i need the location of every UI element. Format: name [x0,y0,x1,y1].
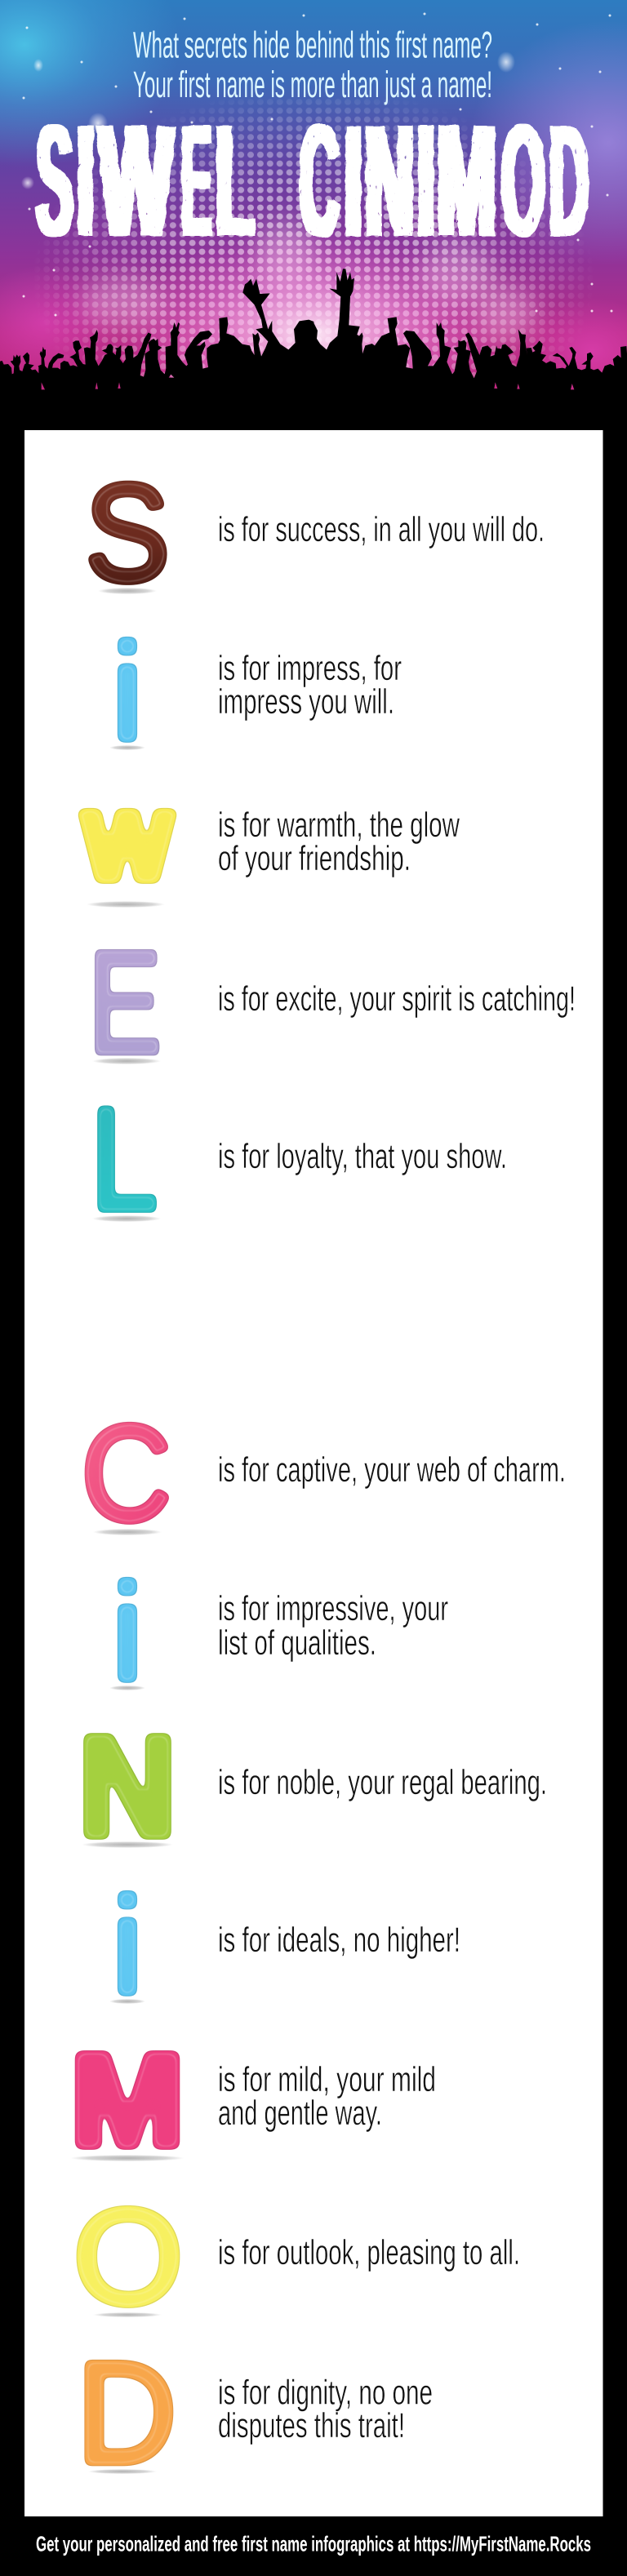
text: I lines: impress you will. [218,682,394,722]
text: D lines: is for dignity, no one [218,2374,433,2413]
row: third I [109,1871,460,2022]
header background [0,0,627,390]
title: O [501,91,545,270]
title: I [417,91,435,270]
black band below crowd [0,390,627,439]
icon: letter N: N [79,1707,176,1865]
icon: letter M: M [71,2027,184,2173]
panel: white letter list [24,430,603,2516]
row: C [82,1397,566,1548]
icon: letter E: E [88,922,162,1083]
text: D lines: disputes this trait! [218,2406,405,2445]
title: I [345,91,362,270]
subtitle [133,24,492,105]
row: first I [109,617,402,768]
icon: letter L: L [91,1079,158,1240]
title [34,91,589,270]
title: M [437,91,496,270]
crowd silhouette [0,269,627,400]
row: W [83,794,460,908]
text: I line: is for ideals, no higher! [218,1921,460,1960]
icon: letter D: D [77,2332,176,2494]
icon: letter C: C [82,1397,171,1548]
title: L [216,91,255,270]
text: M lines: and gentle way. [218,2094,382,2133]
icon: letter O: O [73,2181,183,2332]
text: W lines: is for warmth, the glow [218,806,460,845]
row: N [79,1707,547,1865]
icon: letter I: i [113,617,142,768]
title: D [549,91,589,270]
row: O [73,2181,520,2332]
icon: letter I: i [113,1557,142,1708]
text: I lines: is for impress, for [218,649,402,688]
row: second I [109,1557,448,1708]
row: D [77,2332,433,2494]
row: L [91,1079,507,1240]
title: I [77,91,95,270]
text: M lines: is for mild, your mild [218,2060,436,2099]
title: C [300,91,340,270]
row: E [88,922,576,1083]
title: S [36,91,73,270]
title: W [99,91,173,270]
icon: letter I: i [113,1871,142,2022]
title: N [365,91,414,270]
icon: letter W: W [83,794,172,899]
icon: letter S: S [85,456,170,610]
text: I lines: is for impressive, your [218,1589,448,1628]
text: I lines: list of qualities. [218,1623,376,1663]
title: E [181,91,211,270]
row: S [85,456,545,610]
row: M [70,2027,436,2173]
text: W lines: of your friendship. [218,839,411,878]
